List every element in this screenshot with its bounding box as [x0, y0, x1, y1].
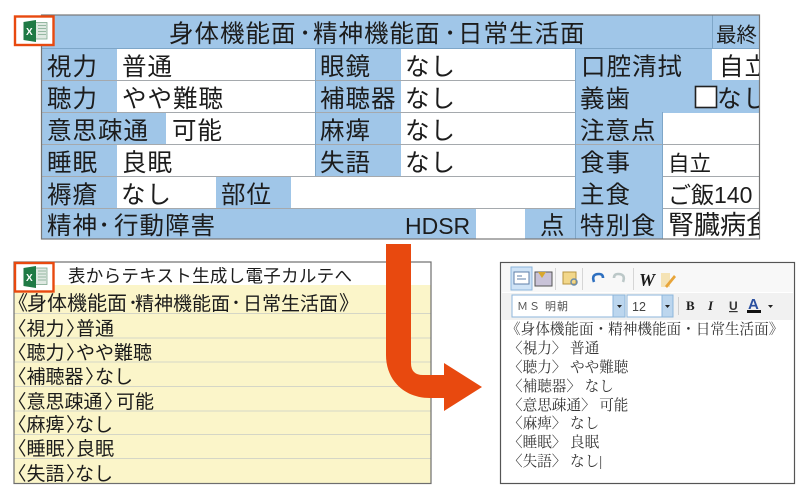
list rows: 〈	[8, 438, 27, 460]
editor text: 〈睡眠〉 良眠	[508, 434, 600, 451]
list rows: 麻痺	[26, 414, 65, 436]
list rows: 可能	[116, 391, 154, 413]
heading: table title: ･	[444, 21, 457, 48]
right column values, clipped at the table edge: ご飯140	[668, 182, 752, 208]
toolbar row two controls: B	[686, 298, 695, 313]
arrow: table to chart	[386, 244, 482, 411]
row labels and values: なし	[405, 118, 456, 145]
list rows: 〉	[66, 414, 85, 436]
heading: generated text title: 表からテキスト生成し電子カルテへ	[68, 266, 352, 286]
list rows: 》	[339, 293, 359, 315]
list rows: 意思疎通	[26, 391, 103, 413]
list rows: 身体機能面	[27, 292, 127, 315]
editor text: 〈麻痺〉 なし	[508, 415, 599, 432]
toolbar row two controls: 12	[632, 300, 646, 314]
right column values, clipped at the table edge	[670, 54, 759, 236]
list rows: 視力	[26, 318, 65, 340]
toolbar row two controls: A	[748, 296, 759, 313]
row labels and values: HDSR	[405, 213, 470, 239]
toolbar row two controls: ＭＳ 明朝	[517, 300, 569, 313]
heading: table title: 精神機能面	[313, 20, 440, 48]
right column values, clipped at the table edge: なし	[717, 86, 768, 113]
icon: excel top	[15, 16, 54, 45]
list rows: やや難聴	[76, 342, 152, 364]
row labels and values: 特別食	[580, 212, 656, 240]
row labels and values: 失語	[320, 149, 371, 177]
row labels and values: 注意点	[580, 117, 656, 145]
list rows: 〉	[66, 342, 85, 364]
list rows: ･	[231, 293, 241, 315]
list rows: 〈	[8, 318, 27, 340]
toolbar row two controls: U	[729, 299, 738, 313]
toolbar row two controls: I	[707, 298, 714, 313]
row labels and values: 補聴器	[320, 85, 396, 113]
row labels and values: 部位	[221, 181, 272, 209]
list rows: 補聴器	[26, 366, 84, 388]
list rows: 〉	[66, 438, 85, 460]
list rows: 〉	[85, 366, 104, 388]
list rows: ･	[128, 293, 138, 315]
header cell: last: 最終	[716, 24, 757, 47]
editor text: 〈補聴器〉 なし	[508, 377, 614, 395]
row labels and values: 良眠	[122, 149, 173, 177]
toolbar row one icons: W	[639, 270, 657, 290]
list rows: 〈	[8, 342, 27, 364]
list rows: 日常生活面	[243, 293, 338, 315]
row labels and values	[47, 53, 683, 240]
heading: table title: 身体機能面	[169, 20, 296, 48]
row labels and values: 義歯	[580, 85, 631, 113]
row labels and values: やや難聴	[122, 85, 224, 113]
heading: table title: ･	[299, 21, 312, 48]
row labels and values: 麻痺	[320, 117, 371, 145]
list rows: 〈	[8, 366, 27, 388]
row labels and values: 点	[540, 212, 566, 240]
list rows	[8, 292, 359, 485]
list rows: 良眠	[76, 438, 114, 460]
row labels and values: 睡眠	[47, 149, 98, 177]
toolbar row one icons	[511, 267, 676, 290]
row labels and values: 精神	[47, 212, 98, 240]
row labels and values: 行動障害	[114, 212, 216, 240]
right column values, clipped at the table edge: 腎臓病食	[668, 210, 772, 240]
list rows: 〈	[8, 463, 27, 485]
editor text: 《身体機能面・精神機能面・日常生活面》	[506, 321, 783, 338]
list rows: 聴力	[26, 342, 65, 364]
heading: table title	[169, 20, 586, 48]
list rows: なし	[95, 367, 133, 388]
row labels and values: 褥瘡	[47, 181, 98, 209]
editor text: 〈視力〉 普通	[508, 339, 600, 357]
list rows: 《	[8, 293, 28, 315]
row labels and values: なし	[405, 86, 456, 113]
list rows: なし	[75, 415, 113, 436]
icon: excel lower: X	[26, 273, 33, 284]
list rows: 〉	[66, 463, 85, 485]
row labels and values: 意思疎通	[47, 117, 149, 145]
row labels and values: ･	[98, 213, 111, 240]
row labels and values: 食事	[580, 149, 631, 177]
row labels and values: 普通	[122, 53, 173, 81]
list rows: 〈	[8, 391, 27, 413]
list rows: 〉	[104, 391, 123, 413]
list rows: 失語	[26, 463, 65, 485]
editor text: 〈聴力〉 やや難聴	[508, 359, 629, 376]
editor text: 〈意思疎通〉 可能	[508, 396, 628, 414]
row labels and values: なし	[405, 54, 456, 81]
list rows: 普通	[76, 318, 114, 340]
row labels and values: なし	[121, 182, 172, 209]
row labels and values: 聴力	[47, 85, 98, 113]
heading: table title: 日常生活面	[458, 20, 586, 48]
right column values, clipped at the table edge: 自立	[668, 152, 711, 176]
toolbar row two controls	[512, 295, 773, 317]
list rows: 精神機能面	[135, 293, 230, 315]
row labels and values: 可能	[172, 117, 223, 145]
panel: electronic chart editor	[500, 262, 794, 484]
row labels and values: 眼鏡	[320, 53, 371, 81]
icon: excel top: X	[26, 27, 33, 38]
panel: source table	[42, 15, 772, 240]
icon: excel lower	[15, 263, 54, 292]
list rows: 〈	[8, 414, 27, 436]
panel: generated text table	[8, 262, 431, 485]
list rows: なし	[75, 464, 113, 485]
list rows: 睡眠	[26, 438, 65, 460]
right column values, clipped at the table edge: 自立	[719, 53, 770, 81]
row labels and values: 視力	[47, 53, 98, 81]
row labels and values: 主食	[580, 181, 631, 209]
row labels and values: 口腔清拭	[581, 53, 683, 81]
list rows: 〉	[66, 318, 85, 340]
editor text: 〈失語〉 なし|	[508, 453, 602, 470]
editor text	[506, 321, 783, 470]
row labels and values: なし	[405, 150, 456, 177]
